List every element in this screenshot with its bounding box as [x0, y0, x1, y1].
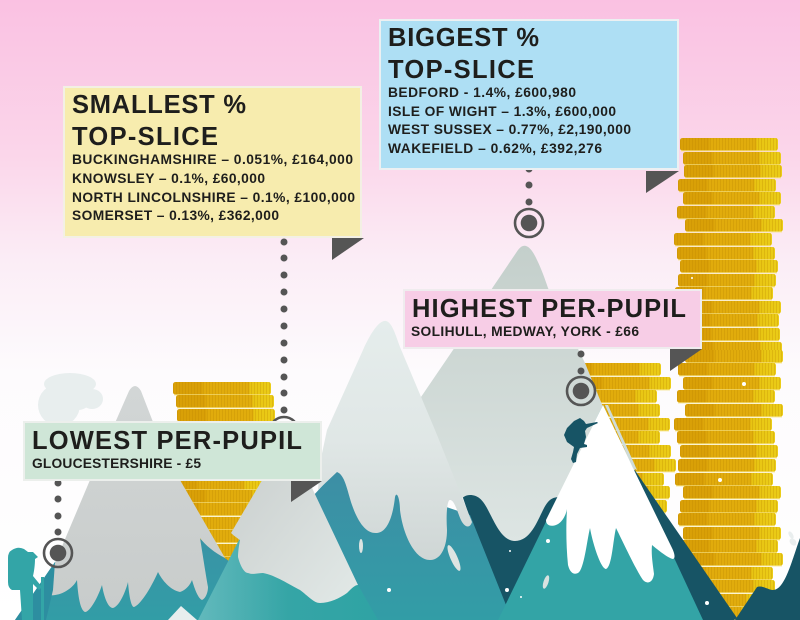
- coin stack: right: [665, 138, 783, 620]
- heading: smallest % top-slice: [72, 91, 246, 151]
- marker: biggest top-slice dotted line and ring: [515, 166, 543, 237]
- coin stack: left: [160, 382, 275, 570]
- grey sliver on white peak edge: [605, 405, 637, 470]
- heading: biggest % top-slice: [388, 24, 539, 84]
- mountain: dark teal base: [462, 466, 737, 620]
- text: smallest list: [72, 152, 355, 223]
- mountain: white peak teal base: [498, 405, 703, 620]
- icon: climber: [564, 418, 598, 463]
- icon: cloud: [38, 373, 103, 426]
- panel: highest per-pupil: [404, 290, 702, 371]
- marker: lowest per-pupil dotted line and ring: [44, 480, 72, 567]
- mountain: centre snow cap: [318, 321, 472, 560]
- text: smallest list: SOMERSET – 0.13%, £362,000: [72, 208, 279, 223]
- panel: lowest per-pupil: [24, 422, 322, 502]
- heading: biggest % top-slice: BIGGEST %: [388, 24, 539, 52]
- faint cloud right: [787, 531, 798, 547]
- heading: lowest per-pupil: LOWEST PER-PUPIL: [32, 427, 302, 455]
- coin stack: middle: [559, 363, 676, 513]
- panel: smallest % top-slice: [64, 87, 364, 260]
- text: smallest list: NORTH LINCOLNSHIRE – 0.1%, £100,000: [72, 190, 355, 205]
- heading: highest per-pupil: HIGHEST PER-PUPIL: [412, 295, 686, 323]
- panel: biggest % top-slice: [380, 20, 679, 193]
- heading: smallest % top-slice: SMALLEST %: [72, 91, 246, 119]
- mountain: front grey snow cap: [231, 436, 358, 603]
- mountain: centre teal base: [300, 470, 512, 620]
- marker: highest per-pupil dotted line and ring: [567, 350, 595, 405]
- text: biggest list: ISLE OF WIGHT – 1.3%, £600,000: [388, 104, 616, 119]
- icon: hiker: [8, 548, 55, 620]
- mountain: far right dark ridge: [735, 538, 800, 620]
- text: biggest list: BEDFORD - 1.4%, £600,980: [388, 85, 576, 100]
- text: smallest list: BUCKINGHAMSHIRE – 0.051%, £164,000: [72, 152, 353, 167]
- text: biggest list: WEST SUSSEX – 0.77%, £2,190,000: [388, 122, 631, 137]
- mountain: left teal base: [15, 500, 230, 620]
- small white peak: [168, 606, 197, 620]
- marker: smallest top-slice dotted line and ring: [270, 238, 298, 445]
- text: lowest list: GLOUCESTERSHIRE - £5: [32, 456, 201, 471]
- text: biggest list: WAKEFIELD – 0.62%, £392,276: [388, 141, 602, 156]
- mountain: white peak snow cap: [546, 405, 675, 582]
- text: highest list: SOLIHULL, MEDWAY, YORK - £66: [411, 324, 639, 339]
- mountain: front teal: [198, 538, 378, 620]
- snow flecks: [387, 539, 709, 605]
- heading: biggest % top-slice: TOP-SLICE: [388, 56, 534, 84]
- heading: smallest % top-slice: TOP-SLICE: [72, 123, 218, 151]
- text: smallest list: KNOWSLEY – 0.1%, £60,000: [72, 171, 265, 186]
- mountain: back grey snow cap: [421, 246, 635, 541]
- text: biggest list: [388, 85, 631, 156]
- snow drips on centre mountain: [359, 539, 463, 572]
- mountain: left snow cap: [48, 386, 225, 612]
